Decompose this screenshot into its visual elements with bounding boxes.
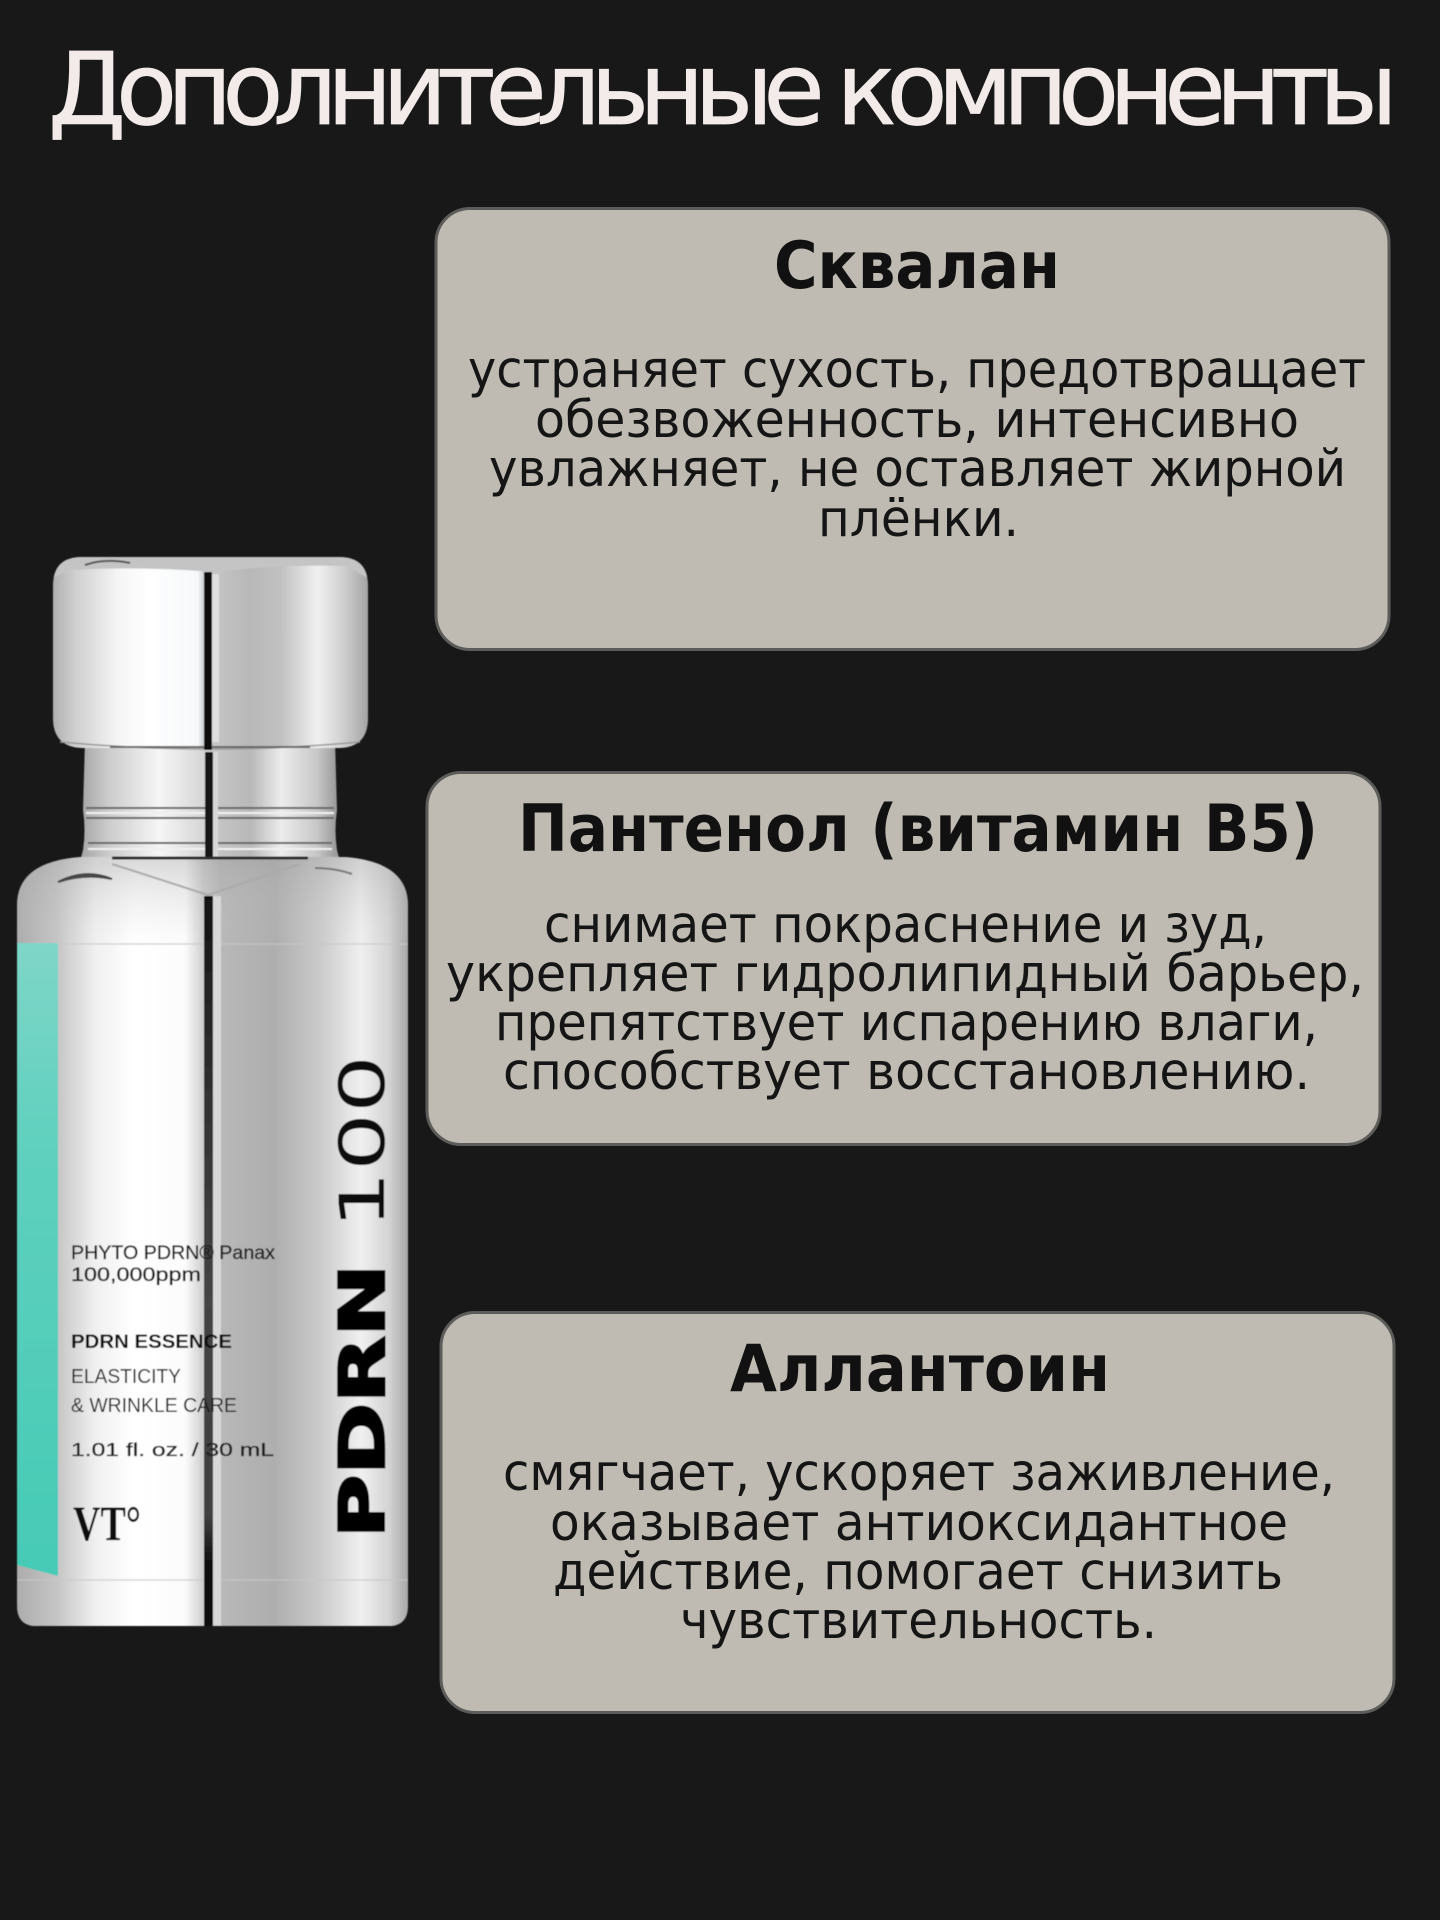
text: panthenol benefits	[446, 896, 1364, 1102]
heading: squalane: Сквалан	[774, 229, 1060, 304]
heading: allantoin: Аллантоин	[730, 1332, 1110, 1407]
text: allantoin benefits: действие, помогает снизить	[553, 1543, 1283, 1602]
heading: panthenol: Пантенол (витамин В5)	[518, 792, 1318, 867]
text: allantoin benefits: чувствительность.	[680, 1592, 1157, 1651]
text: squalane benefits: устраняет сухость, предотвращает	[468, 341, 1366, 400]
title: Дополнительные компоненты	[48, 31, 1398, 148]
panel: allantoin	[441, 1312, 1394, 1712]
panel: panthenol	[427, 772, 1380, 1144]
label text: & WRINKLE CARE	[71, 1395, 237, 1417]
label text: 100,000ppm	[71, 1265, 201, 1286]
label text: 1.01 fl. oz. / 30 mL	[71, 1440, 274, 1460]
label text: PDRN ESSENCE	[71, 1332, 232, 1353]
text: squalane benefits	[468, 341, 1366, 549]
text: allantoin benefits: смягчает, ускоряет заживление,	[503, 1444, 1335, 1503]
teal label stripe	[17, 943, 58, 1576]
vertical product name: PDRN	[326, 1264, 399, 1538]
text: squalane benefits: увлажняет, не оставляет жирной	[489, 440, 1346, 499]
label text: PHYTO PDRN® Panax	[71, 1243, 276, 1264]
vertical product name: 100	[326, 1055, 399, 1229]
panel: squalane	[436, 208, 1389, 650]
text: panthenol benefits: способствует восстановлению.	[503, 1043, 1310, 1102]
text: allantoin benefits	[503, 1444, 1335, 1651]
vertical product name	[326, 1055, 399, 1538]
text: squalane benefits: обезвоженность, интенсивно	[535, 391, 1299, 450]
label text: VT°	[73, 1495, 141, 1551]
bottle cap	[53, 557, 368, 750]
text: panthenol benefits: укрепляет гидролипидный барьер,	[446, 945, 1364, 1004]
label text: ELASTICITY	[71, 1366, 181, 1388]
text: allantoin benefits: оказывает антиоксидантное	[550, 1494, 1288, 1553]
product bottle	[17, 557, 408, 1626]
text: panthenol benefits: препятствует испарению влаги,	[495, 994, 1318, 1053]
label text	[71, 1243, 276, 1551]
bottle neck	[79, 740, 341, 865]
bottle body	[17, 857, 408, 1626]
text: squalane benefits: плёнки.	[818, 490, 1019, 549]
text: panthenol benefits: снимает покраснение и зуд,	[544, 896, 1267, 955]
